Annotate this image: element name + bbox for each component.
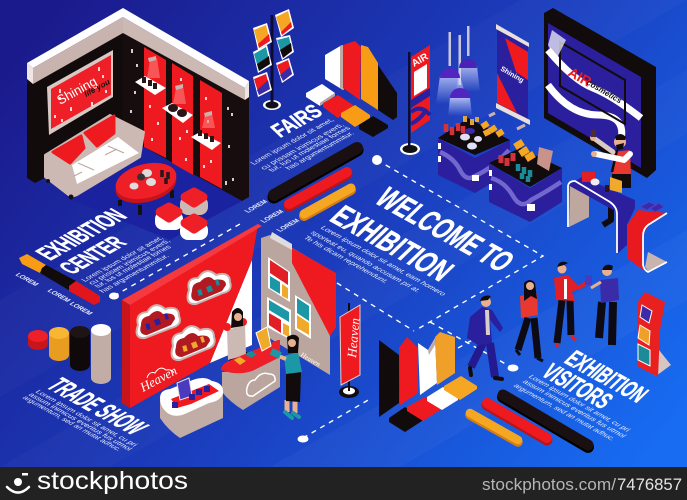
exhibition center text: tur, lus ut molestiae fornes: [92, 244, 173, 289]
heading: exhibition visitors: VISITORS: [536, 358, 619, 414]
dashed connector lines: [109, 155, 543, 442]
fairs bar labels: LOREM: [260, 209, 286, 224]
watermark bar: 7476857: [617, 476, 682, 494]
AIR flag: [400, 45, 431, 155]
table one: [438, 116, 510, 193]
trade show text: assum inimicus everitus fus utmol: [26, 392, 135, 452]
roll-up banner: [489, 24, 530, 129]
brochure stand: [253, 9, 294, 110]
exhibition center bar labels: LOREM: [67, 302, 94, 316]
heading: exhibition visitors: [536, 345, 655, 414]
bottom bars: [470, 395, 588, 447]
salesman: [590, 130, 631, 225]
heading: trade show: TRADE SHOW: [39, 375, 154, 439]
picture panel: Shining: life you: [83, 77, 112, 99]
heading: exhibition center: CENTER: [53, 233, 133, 278]
intro text: Lorem ipsum dolor sit amet, eam homero: [318, 225, 449, 297]
woman at booth: [223, 308, 247, 375]
cosmetics display screen: cosmetics: [585, 78, 624, 106]
exhibition center bar labels: LOREM: [45, 289, 72, 303]
visitors text: Lorem ipsum dolor sit amet, cu pri: [526, 374, 633, 433]
heading: exhibition center: EXHIBITION: [29, 205, 133, 264]
cylinders: [28, 324, 111, 384]
cloud pedestal: [160, 378, 223, 438]
watermark bar: stockphotos.com/: [482, 476, 616, 494]
fairs bar labels: [244, 199, 302, 233]
exhibition center booth: [27, 8, 249, 240]
exhibition center bar labels: [13, 273, 94, 316]
visitors text: argumentum, sed an mutat adhuc.: [511, 383, 618, 442]
sofa: [45, 115, 144, 200]
bottom chart: arch columns and blocks: [379, 332, 477, 432]
cosmetics display screen: [544, 8, 656, 178]
picture panel: Shining: Shining: [54, 73, 99, 108]
trade show booth: [122, 224, 336, 408]
AIR flag: AIR: [410, 51, 431, 70]
trade show text: Lorem ipsum dolor sit amet, cu pri: [33, 389, 140, 448]
intro text: sporteat eu, quando accusam pri at.: [308, 230, 424, 294]
stools: [155, 192, 208, 240]
trade show booth: Heaven: [298, 350, 322, 369]
reception desk: [221, 327, 280, 410]
fairs text: cu prissam inimicus everti,: [258, 122, 346, 171]
Heaven flag: [339, 303, 362, 398]
trade show text: argumentum, sed an mutat adhuc.: [20, 395, 124, 452]
title: welcome to exhibition: [323, 181, 522, 287]
fairs bar labels: LOREM: [276, 218, 302, 233]
trade show booth: Heaven: [136, 363, 179, 395]
exhibition center text: cu prissam inimicus everti,: [86, 238, 172, 286]
posters: [267, 257, 311, 340]
table two: [489, 142, 562, 222]
logo icon: [7, 473, 29, 492]
woman customer: [270, 335, 302, 418]
cloud shelves: [137, 271, 231, 360]
hanging lamps: [436, 26, 480, 116]
exhibition center bar labels: LOREM: [13, 273, 40, 287]
round table with products: [112, 157, 180, 215]
fairs text: tur, lus ut molestiae fornes: [266, 125, 353, 173]
fairs bar labels: LOREM: [244, 199, 270, 214]
fairs text: Lorem ipsum dolor sit amet,: [248, 117, 336, 166]
fairs text: has argumentummitur.: [283, 130, 356, 171]
visitors text: assum inimicus everitus fus utmol: [520, 379, 629, 439]
exhibition center text: Lorem ipsum dolor sit amet,: [79, 235, 165, 283]
product tables: [438, 116, 562, 222]
demo desk and red stand: [568, 172, 667, 272]
title: welcome to exhibition: WELCOME TO: [368, 181, 522, 278]
visitor: man in navy suit: [467, 296, 503, 379]
watermark bar: [0, 467, 687, 500]
cosmetics display screen: AIR: [566, 64, 594, 90]
heading: exhibition center: [29, 205, 133, 278]
left segmented bar: [19, 254, 100, 305]
Heaven flag: Heaven: [344, 317, 362, 359]
watermark bar: stockphotos: [37, 467, 188, 495]
heading: fairs: FAIRS: [266, 100, 327, 141]
title: welcome to exhibition: EXHIBITION: [323, 199, 462, 287]
kiosk: [637, 292, 671, 377]
roll-up banner: Shining: [499, 66, 525, 85]
exhibition center text: has argumentummitur.: [97, 253, 171, 294]
intro text: Te his dicam reprehendunt.: [301, 235, 391, 285]
visitor: woman in red jacket: [554, 262, 590, 348]
fairs bars: [274, 148, 357, 216]
visitor: man in purple shirt: [585, 265, 619, 345]
visitor: woman in red top: [516, 280, 543, 361]
visitors: [467, 262, 619, 379]
fairs chart: arch columns and blocks: [306, 41, 397, 137]
shelves with bottles: [135, 56, 221, 150]
picture panel: Shining: [47, 50, 113, 135]
